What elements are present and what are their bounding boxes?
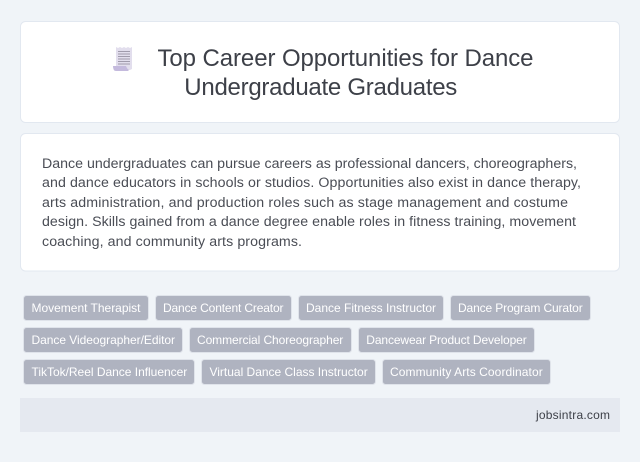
title panel — [20, 22, 620, 122]
career tags — [24, 296, 590, 384]
tag: Commercial Choreographer — [197, 333, 343, 347]
tag — [358, 328, 534, 352]
description text: arts administration, and production roles such as stage management and costume — [42, 195, 568, 211]
tag: Dance Videographer/Editor — [32, 333, 175, 347]
tag — [156, 296, 292, 320]
tag — [450, 296, 590, 320]
tag: Community Arts Coordinator — [390, 365, 543, 379]
tag — [202, 360, 376, 384]
title: Top Career Opportunities for Dance — [158, 45, 534, 72]
tag: Dance Content Creator — [163, 301, 284, 315]
tag — [382, 360, 550, 384]
tag: Dancewear Product Developer — [366, 333, 527, 347]
tag: Virtual Dance Class Instructor — [210, 365, 368, 379]
description text: coaching, and community arts programs. — [42, 234, 302, 250]
tag: Movement Therapist — [32, 301, 141, 315]
tag — [298, 296, 444, 320]
tag: Dance Program Curator — [458, 301, 583, 315]
tag — [24, 296, 148, 320]
tag: Dance Fitness Instructor — [306, 301, 436, 315]
footer source text: jobsintra.com — [535, 408, 610, 422]
description text: and dance educators in schools or studios. Opportunities also exist in dance therapy, — [42, 175, 581, 191]
footer bar — [20, 398, 620, 432]
tag — [24, 360, 194, 384]
description text: design. Skills gained from a dance degree enable roles in fitness training, movement — [42, 214, 576, 230]
description text: Dance undergraduates can pursue careers as professional dancers, choreographers, — [42, 156, 577, 172]
icon: document scroll — [113, 47, 132, 71]
tag — [190, 328, 352, 352]
tag: TikTok/Reel Dance Influencer — [32, 365, 187, 379]
tag — [24, 328, 182, 352]
title: Undergraduate Graduates — [184, 74, 457, 101]
description panel — [20, 134, 620, 271]
